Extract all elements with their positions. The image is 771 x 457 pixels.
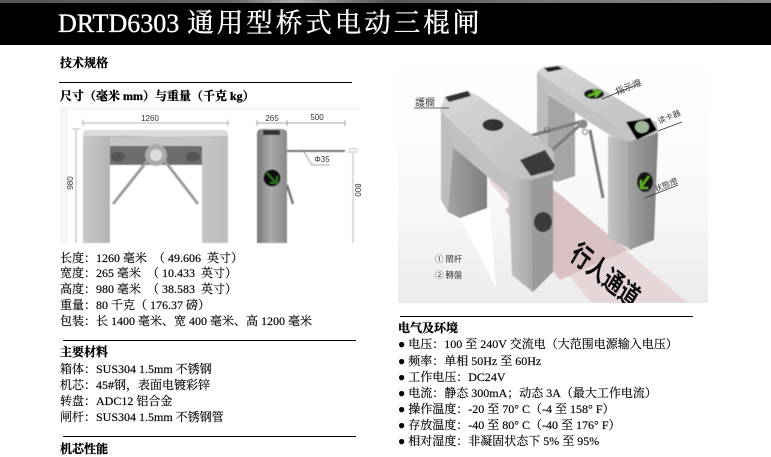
specs list: dimensions: 高度：980 毫米 （ 38.583 英寸） [60, 282, 237, 296]
left gate [440, 91, 555, 292]
specs list: electrical and environment: ● 存放温度：-40 至 80° C（-40 至 176° F） [398, 418, 621, 432]
specs list: dimensions: 宽度：265 毫米 （ 10.433 英寸） [60, 266, 237, 280]
walkway lettering: 行人通道 [566, 238, 645, 315]
specs list: materials: 箱体：SUS304 1.5mm 不锈钢 [60, 362, 212, 376]
callout: indicator light [602, 78, 642, 100]
specs list: materials: 闸杆：SUS304 1.5mm 不锈钢管 [60, 410, 224, 424]
callout: card reader: 读卡器 [656, 108, 682, 127]
dimension drawings [60, 64, 708, 303]
callout: card reader [658, 110, 682, 132]
specs list: dimensions: 包装：长 1400 毫米、宽 400 毫米、高 1200 毫米 [60, 314, 312, 328]
specs list: materials [60, 362, 224, 424]
photo legend [435, 254, 462, 279]
front view dimension labels [66, 114, 159, 190]
specs list: electrical and environment: ● 电压：100 至 240V 交流电（大范围电源输入电压） [398, 337, 678, 351]
specs list: dimensions: 重量：80 千克（ 176.37 磅） [60, 298, 210, 312]
heading: mechanism performance: 机芯性能 [60, 442, 108, 456]
front view dimension labels: 1260 [141, 114, 159, 123]
heading: main materials: 主要材料 [60, 345, 108, 359]
callout: guardrail: 護欄 [415, 94, 435, 109]
side view dimension labels: 265 [265, 114, 279, 123]
heading: electrical and environment: 电气及环境 [398, 321, 458, 335]
walkway strip [488, 178, 688, 303]
right gate [537, 65, 658, 250]
side view drawing [257, 120, 358, 243]
photo legend: ② 轉盤 [435, 269, 463, 281]
side view dimension labels: 500 [310, 113, 324, 122]
specs list: electrical and environment: ● 相对湿度：非凝固状态下 5% 至 95% [398, 434, 599, 448]
turnstile arms [530, 120, 603, 198]
specs list: electrical and environment: ● 频率：单相 50Hz 至 60Hz [398, 354, 541, 368]
callout: indicator light: 指示燈 [613, 76, 643, 98]
callout: status light [645, 176, 679, 198]
side view dimension labels: Φ35 [314, 155, 330, 164]
callout: guardrail [414, 97, 449, 108]
specs list: materials: 转盘：ADC12 铝合金 [60, 394, 172, 408]
heading: technical specifications: 技术规格 [60, 56, 108, 70]
specs list: electrical and environment: ● 操作温度：-20 至 70° C（-4 至 158° F） [398, 402, 615, 416]
product photo [398, 62, 708, 315]
title: DRTD6303 通用型桥式电动三棍闸 [58, 8, 482, 38]
front view drawing [60, 107, 360, 243]
photo legend: ① 閘杆 [435, 253, 463, 265]
top photo strip [0, 0, 771, 3]
front view dimension labels: 980 [66, 176, 75, 190]
specs list: dimensions: 长度：1260 毫米 （ 49.606 英寸） [60, 251, 243, 265]
specs list: electrical and environment: ● 电流：静态 300mA；动态 3A（最大工作电流） [398, 386, 657, 400]
side view dimension labels [265, 113, 362, 197]
specs list: materials: 机芯：45#钢，表面电镀彩锌 [60, 378, 210, 392]
specs list: electrical and environment [398, 337, 678, 448]
callout: status light: 状態燈 [653, 176, 679, 195]
title banner [0, 3, 771, 45]
heading: dimensions and weight: 尺寸（毫米 mm）与重量（千克 kg） [60, 89, 255, 103]
floor reflections [462, 215, 496, 286]
specs list: dimensions [60, 251, 312, 328]
specs list: electrical and environment: ● 工作电压：DC24V [398, 370, 506, 384]
side view dimension labels: 800 [353, 183, 362, 197]
